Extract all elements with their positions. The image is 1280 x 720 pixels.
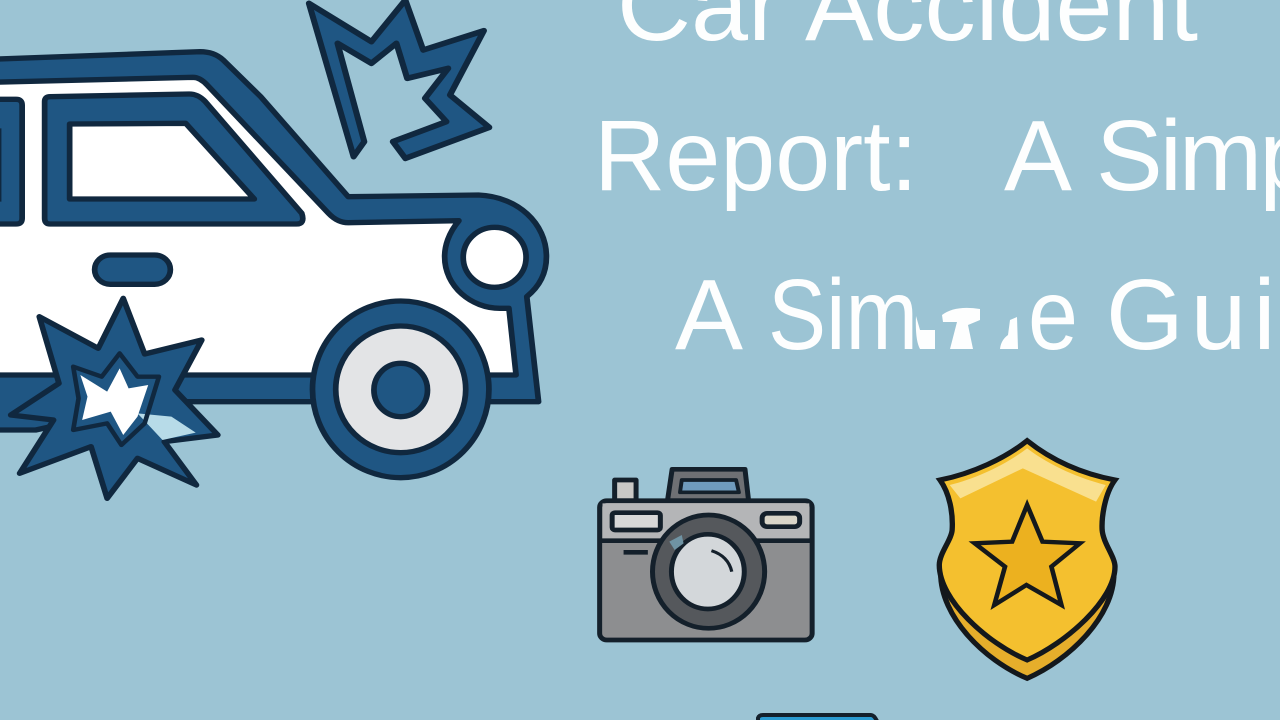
camera viewfinder	[667, 469, 749, 501]
camera lens	[652, 515, 765, 628]
shield star	[975, 505, 1080, 605]
icon: camera	[600, 469, 812, 640]
icon: partially visible blue object	[758, 715, 877, 720]
title line 3: Sim	[768, 259, 918, 371]
shield back layer	[941, 573, 1114, 678]
camera flash button	[615, 480, 636, 501]
shield front	[939, 441, 1115, 660]
title line 3: A	[675, 259, 743, 371]
shield highlight	[950, 448, 1106, 502]
car white body	[0, 77, 516, 375]
camera top band	[602, 503, 809, 539]
front window frame	[45, 94, 303, 224]
rear window edge	[0, 128, 5, 202]
headlight	[463, 227, 526, 287]
door handle	[95, 255, 170, 284]
rear window pillar	[0, 99, 22, 224]
title line 2: A	[1004, 100, 1072, 212]
title line 3	[675, 259, 1280, 371]
wheel	[312, 301, 489, 478]
crash burst above hood	[309, 0, 489, 158]
camera controls	[612, 513, 800, 552]
icon: police badge shield	[939, 441, 1115, 678]
title line 2: Report:	[594, 100, 918, 212]
car outer shell	[0, 52, 546, 430]
front window glass	[70, 123, 254, 199]
title line 2	[594, 100, 1280, 212]
icon: damaged car	[0, 0, 546, 498]
camera body	[600, 501, 812, 640]
title line 3: e	[1028, 259, 1078, 371]
impact burst on car	[11, 298, 218, 498]
